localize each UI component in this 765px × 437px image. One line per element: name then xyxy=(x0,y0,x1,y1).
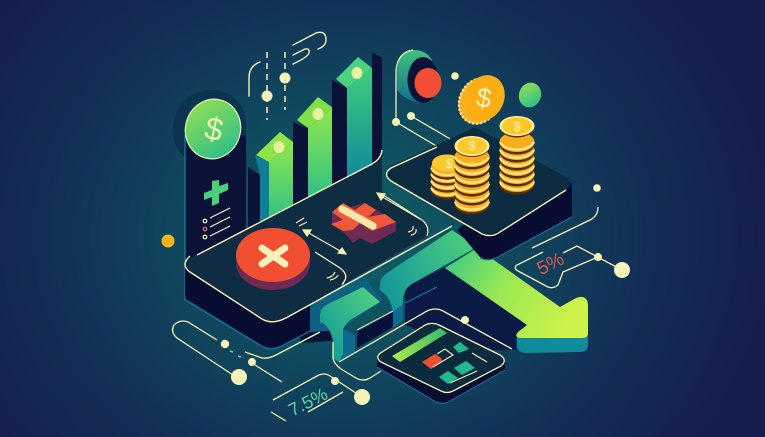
chart connector dashes and dots xyxy=(262,52,290,120)
green arrow xyxy=(445,248,588,353)
icon: green plus xyxy=(204,180,228,206)
connector: left arch xyxy=(310,276,393,362)
middle coin stack xyxy=(454,136,490,214)
bar chart xyxy=(248,52,382,238)
flying coin: $ xyxy=(474,82,494,114)
right coin stack: $ xyxy=(513,119,521,134)
flying coin xyxy=(451,68,512,131)
bar 3 xyxy=(332,52,382,188)
green oval xyxy=(515,79,545,111)
checklist xyxy=(203,208,230,239)
yellow dot xyxy=(162,234,174,248)
bar 1 xyxy=(248,132,293,238)
calculator screen xyxy=(392,328,447,362)
middle coin stack: $ xyxy=(468,138,476,153)
connector lines to coin platform xyxy=(392,72,459,147)
right coin stack xyxy=(500,116,534,194)
label: 7.5% xyxy=(271,374,370,421)
icon: dollar coin: $ xyxy=(202,110,227,148)
icon: red cancel button xyxy=(236,228,310,290)
circuit line: under connector xyxy=(333,309,512,380)
connector: right arch xyxy=(363,230,477,328)
coin platform xyxy=(386,127,572,260)
circuit line: loop left with dots xyxy=(173,321,320,385)
icon: red plus block xyxy=(331,203,396,244)
label: 5% xyxy=(515,184,630,288)
label: 7.5%: 7.5% xyxy=(285,384,331,420)
left column with dollar badge xyxy=(173,90,247,300)
left coin stack xyxy=(431,154,463,200)
arrows on board xyxy=(296,193,420,280)
bar 2 xyxy=(293,97,333,208)
icon: dollar coin xyxy=(179,93,247,165)
calculator xyxy=(377,323,505,403)
red toggle button xyxy=(396,50,442,120)
main board xyxy=(185,150,452,349)
left coin stack: $ xyxy=(445,156,453,171)
decorative line: top curve and clips xyxy=(249,32,326,96)
calculator buttons xyxy=(422,342,487,384)
dark recess under connectors xyxy=(300,267,527,350)
label: 5%: 5% xyxy=(534,249,568,280)
